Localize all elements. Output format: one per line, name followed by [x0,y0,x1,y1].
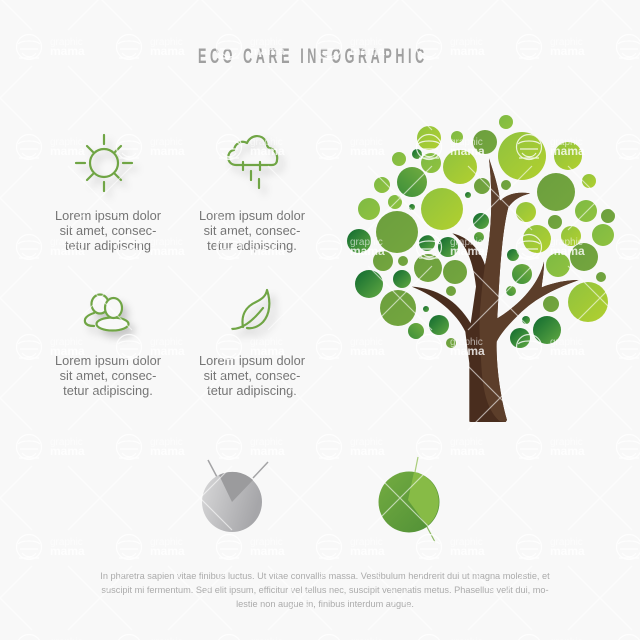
panel: leaf [199,290,306,398]
footer text: lestie non augue in, finibus interdum augue. [236,599,414,609]
tree [347,115,615,422]
tree canopy circles [347,115,615,348]
icon: leaf [232,290,269,329]
text: leaf caption: sit amet, consec- [204,368,300,383]
panel: sun [55,135,162,253]
icon: people [85,294,128,330]
text: people caption: tetur adipiscing. [63,383,153,398]
text: rain caption: sit amet, consec- [204,223,300,238]
icon: sun [76,135,132,191]
panel: people [55,294,162,398]
text: sun caption: sit amet, consec- [60,223,156,238]
text: sun caption: tetur adipiscing [65,238,151,253]
footer text: In pharetra sapien vitae finibus luctus. Ut vitae convallis massa. Vestibulum hendrerit dui ut magna molestie, et [100,571,550,581]
pie chart: grey [202,460,268,532]
text: people caption: Lorem ipsum dolor [55,353,162,368]
title: ECO CARE INFOGRAPHIC [198,44,425,68]
text: leaf caption: Lorem ipsum dolor [199,353,306,368]
text: people caption: sit amet, consec- [60,368,156,383]
pie chart: green [378,457,440,542]
text: rain caption: Lorem ipsum dolor [199,208,306,223]
tree trunk and branches [412,158,579,422]
text: leaf caption: tetur adipiscing. [207,383,297,398]
footer text: suscipit mi fermentum. Sed elit ipsum, efficitur vel tellus nec, suscipit venenatis metus. Phasellus velit dui, mo- [101,585,549,595]
panel: rain cloud [199,136,306,253]
text: sun caption: Lorem ipsum dolor [55,208,162,223]
icon: rain cloud [228,136,277,188]
text: rain caption: tetur adipiscing. [207,238,297,253]
